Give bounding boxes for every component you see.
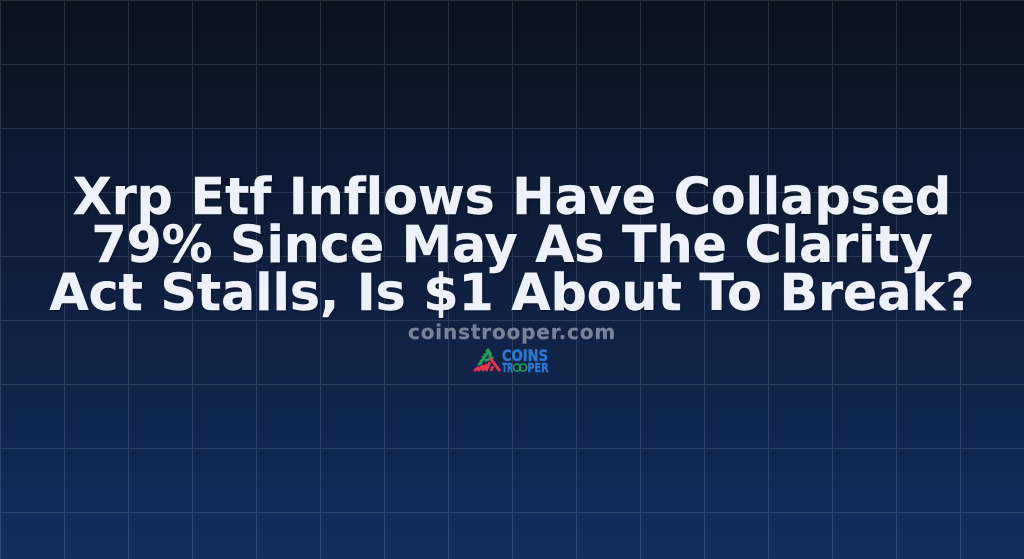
logo wordmark: PER	[528, 361, 548, 375]
source url: coinstrooper.com	[408, 320, 616, 344]
title: 79% Since May As The Clarity	[91, 215, 933, 274]
title: Act Stalls, Is $1 About To Break?	[50, 263, 974, 322]
title: Xrp Etf Inflows Have Collapsed	[73, 167, 951, 226]
logo wordmark	[502, 346, 548, 375]
title	[50, 167, 974, 322]
logo: Coins Trooper	[473, 346, 548, 375]
logo wordmark: TR	[502, 361, 513, 375]
icon: chart mountain	[474, 349, 500, 371]
